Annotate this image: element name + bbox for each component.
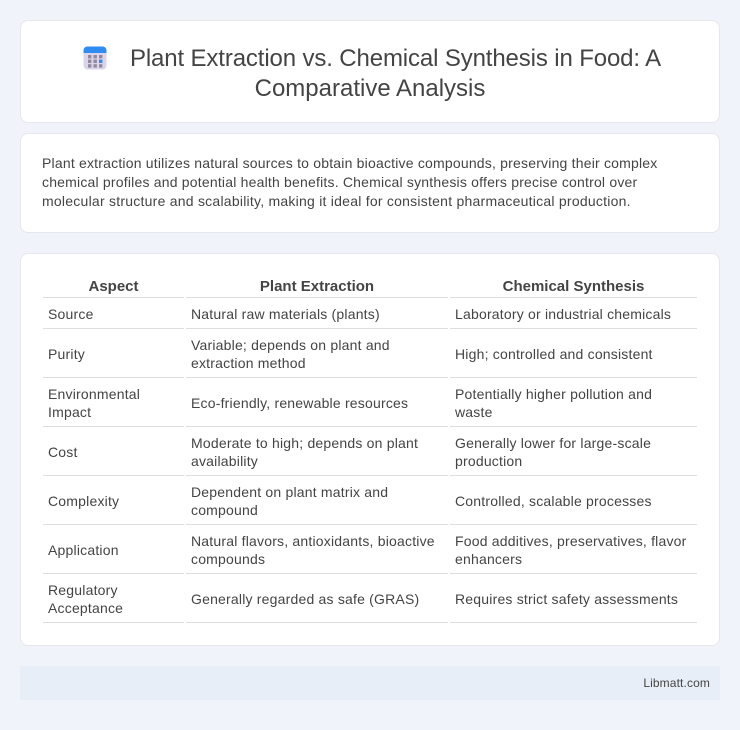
row: regulatory acceptance: Acceptance	[48, 600, 123, 616]
row: environmental impact	[48, 386, 652, 420]
icon: calendar	[84, 46, 106, 70]
panel: comparison table	[20, 253, 720, 646]
row: source: Natural raw materials (plants)	[191, 306, 380, 322]
table header row	[88, 278, 644, 295]
row: application: enhancers	[455, 551, 522, 567]
footer credit: Libmatt.com	[643, 676, 710, 690]
row: application: Food additives, preservatives, flavor	[455, 533, 687, 549]
row: environmental impact: Impact	[48, 404, 91, 420]
row: application: compounds	[191, 551, 265, 567]
footer bar	[20, 666, 720, 700]
intro paragraph: molecular structure and scalability, making it ideal for consistent pharmaceutical production.	[42, 193, 631, 209]
row: application: Application	[48, 542, 119, 558]
row: purity: Purity	[48, 346, 85, 362]
intro paragraph: Plant extraction utilizes natural sources to obtain bioactive compounds, preserving their complex	[42, 155, 658, 171]
row: environmental impact: Environmental	[48, 386, 140, 402]
row: application	[48, 533, 687, 567]
row: environmental impact: waste	[455, 404, 493, 420]
row: complexity: compound	[191, 502, 258, 518]
row: cost	[48, 435, 651, 469]
intro paragraph: chemical profiles and potential health benefits. Chemical synthesis offers precise control over	[42, 174, 637, 190]
row: purity: extraction method	[191, 355, 306, 371]
row: regulatory acceptance	[48, 582, 678, 616]
row: regulatory acceptance: Generally regarded as safe (GRAS)	[191, 591, 419, 607]
row: complexity: Dependent on plant matrix and	[191, 484, 388, 500]
row: cost: Generally lower for large-scale	[455, 435, 651, 451]
row: complexity: Controlled, scalable processes	[455, 493, 652, 509]
row: source	[48, 306, 671, 322]
row: regulatory acceptance: Requires strict safety assessments	[455, 591, 678, 607]
intro paragraph	[42, 155, 658, 209]
row: purity	[48, 337, 653, 371]
row: cost: Cost	[48, 444, 78, 460]
row: purity: High; controlled and consistent	[455, 346, 653, 362]
row: complexity	[48, 484, 652, 518]
row: cost: production	[455, 453, 522, 469]
panel: introduction text	[20, 133, 720, 233]
row: purity: Variable; depends on plant and	[191, 337, 390, 353]
panel: title header	[20, 20, 720, 123]
table header row: Plant Extraction	[260, 278, 374, 295]
row: source: Laboratory or industrial chemicals	[455, 306, 671, 322]
row: regulatory acceptance: Regulatory	[48, 582, 118, 598]
heading: Plant Extraction vs. Chemical Synthesis in Food: A	[130, 45, 661, 72]
heading	[130, 45, 661, 102]
row: source: Source	[48, 306, 94, 322]
row: cost: Moderate to high; depends on plant	[191, 435, 418, 451]
row: environmental impact: Eco-friendly, renewable resources	[191, 395, 408, 411]
table header row: Aspect	[88, 278, 139, 295]
row: application: Natural flavors, antioxidants, bioactive	[191, 533, 435, 549]
row: cost: availability	[191, 453, 258, 469]
heading: Comparative Analysis	[255, 75, 485, 102]
row: environmental impact: Potentially higher pollution and	[455, 386, 652, 402]
table header row: Chemical Synthesis	[503, 278, 644, 295]
row: complexity: Complexity	[48, 493, 119, 509]
